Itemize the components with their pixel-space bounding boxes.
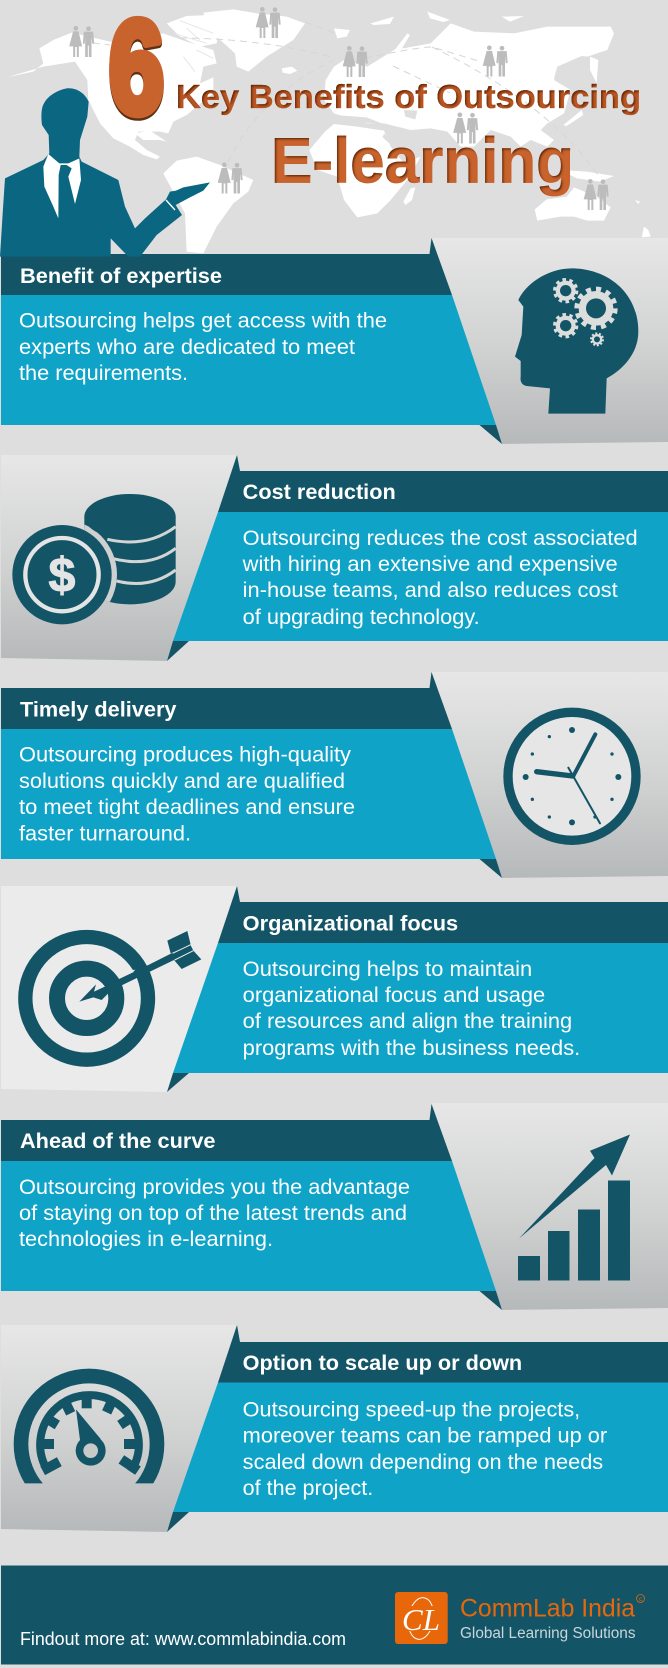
header band xyxy=(1,672,452,729)
footer band xyxy=(1,1566,668,1664)
fold xyxy=(480,1291,502,1310)
dashed connection lines xyxy=(93,22,600,178)
body text: Outsourcing reduces the cost associated xyxy=(243,526,638,550)
body text: programs with the business needs. xyxy=(243,1036,580,1060)
header band xyxy=(218,1325,668,1382)
body band xyxy=(1,729,496,859)
body text: in-house teams, and also reduces cost xyxy=(243,578,618,602)
heading: Ahead of the curve xyxy=(20,1130,216,1153)
body text: the requirements. xyxy=(19,361,188,385)
people icons on map xyxy=(69,7,609,210)
heading: Cost reduction xyxy=(243,481,396,504)
body text: solutions quickly and are qualified xyxy=(19,769,345,793)
panel: option to scale up or down xyxy=(1,1325,668,1532)
body text: moreover teams can be ramped up or xyxy=(243,1424,607,1448)
panel: organizational focus xyxy=(1,886,668,1092)
body text xyxy=(243,1398,607,1500)
footer link text: Findout more at: www.commlabindia.com xyxy=(20,1628,346,1649)
fold xyxy=(480,425,502,444)
panel: benefit of expertise xyxy=(1,238,668,444)
body text: of upgrading technology. xyxy=(243,605,480,629)
header band xyxy=(1,238,452,295)
icon: coins xyxy=(7,494,176,630)
heading: Option to scale up or down xyxy=(243,1352,522,1375)
header band xyxy=(218,886,668,943)
panel: cost reduction xyxy=(1,455,668,661)
icon panel xyxy=(1,886,237,1092)
body text: experts who are dedicated to meet xyxy=(19,335,355,359)
body text: Outsourcing produces high-quality xyxy=(19,743,351,767)
icon: head with gears xyxy=(515,268,638,414)
registered mark xyxy=(636,1594,644,1603)
body band xyxy=(173,943,668,1073)
body text: to meet tight deadlines and ensure xyxy=(19,795,355,819)
icon: growth chart with arrow xyxy=(518,1134,630,1280)
icon: speedometer xyxy=(21,1376,157,1512)
cuff xyxy=(166,200,175,210)
icon panel xyxy=(1,455,237,661)
body text: with hiring an extensive and expensive xyxy=(242,552,618,576)
fold xyxy=(167,641,189,661)
logo tagline: Global Learning Solutions xyxy=(460,1625,636,1642)
logo mark: CL xyxy=(402,1602,440,1637)
icon panel xyxy=(432,238,668,444)
body text: Outsourcing helps get access with the xyxy=(19,309,387,333)
title: E-learning: E-learning xyxy=(271,124,574,196)
icon: coins: $ xyxy=(49,549,76,603)
panel: ahead of the curve xyxy=(1,1103,668,1310)
body text xyxy=(243,957,580,1060)
body band xyxy=(173,1382,668,1512)
body text xyxy=(19,743,355,846)
body text xyxy=(19,309,387,385)
body text: Outsourcing provides you the advantage xyxy=(19,1175,410,1199)
header band xyxy=(1,1104,452,1161)
fold xyxy=(480,859,502,878)
icon panel xyxy=(1,1325,237,1532)
heading: Timely delivery xyxy=(20,699,177,722)
body band xyxy=(1,295,496,425)
logo: CommLab India xyxy=(395,1592,644,1644)
icon panel xyxy=(432,672,668,878)
logo wordmark: CommLab India xyxy=(460,1595,635,1623)
body text: Outsourcing speed-up the projects, xyxy=(243,1398,580,1422)
icon: clock xyxy=(508,712,636,840)
world map xyxy=(7,9,651,253)
body text: of the project. xyxy=(243,1476,373,1500)
body band xyxy=(173,512,668,641)
map gaps: seas xyxy=(173,21,598,151)
header band xyxy=(218,455,668,512)
body text: of resources and align the training xyxy=(243,1009,572,1033)
body band xyxy=(1,1161,496,1291)
body text: technologies in e-learning. xyxy=(19,1227,273,1251)
panel: timely delivery xyxy=(1,672,668,878)
body text: organizational focus and usage xyxy=(243,983,545,1007)
body text xyxy=(242,526,638,629)
body text xyxy=(19,1175,410,1251)
body text: faster turnaround. xyxy=(19,822,191,846)
heading: Benefit of expertise xyxy=(20,265,222,288)
body text: of staying on top of the latest trends and xyxy=(19,1201,407,1225)
registered mark: c xyxy=(639,1597,642,1603)
icon panel xyxy=(432,1103,668,1310)
icon: target with arrow xyxy=(25,931,201,1060)
fold xyxy=(167,1073,189,1092)
body text: scaled down depending on the needs xyxy=(243,1450,603,1474)
logo mark xyxy=(395,1592,448,1644)
title: Key Benefits of Outsourcing: Key Benefits of Outsourcing xyxy=(176,78,641,115)
body text: Outsourcing helps to maintain xyxy=(243,957,532,981)
fold xyxy=(167,1512,189,1532)
heading: Organizational focus xyxy=(243,913,458,936)
shirt xyxy=(43,154,81,218)
businessman silhouette xyxy=(0,88,210,257)
